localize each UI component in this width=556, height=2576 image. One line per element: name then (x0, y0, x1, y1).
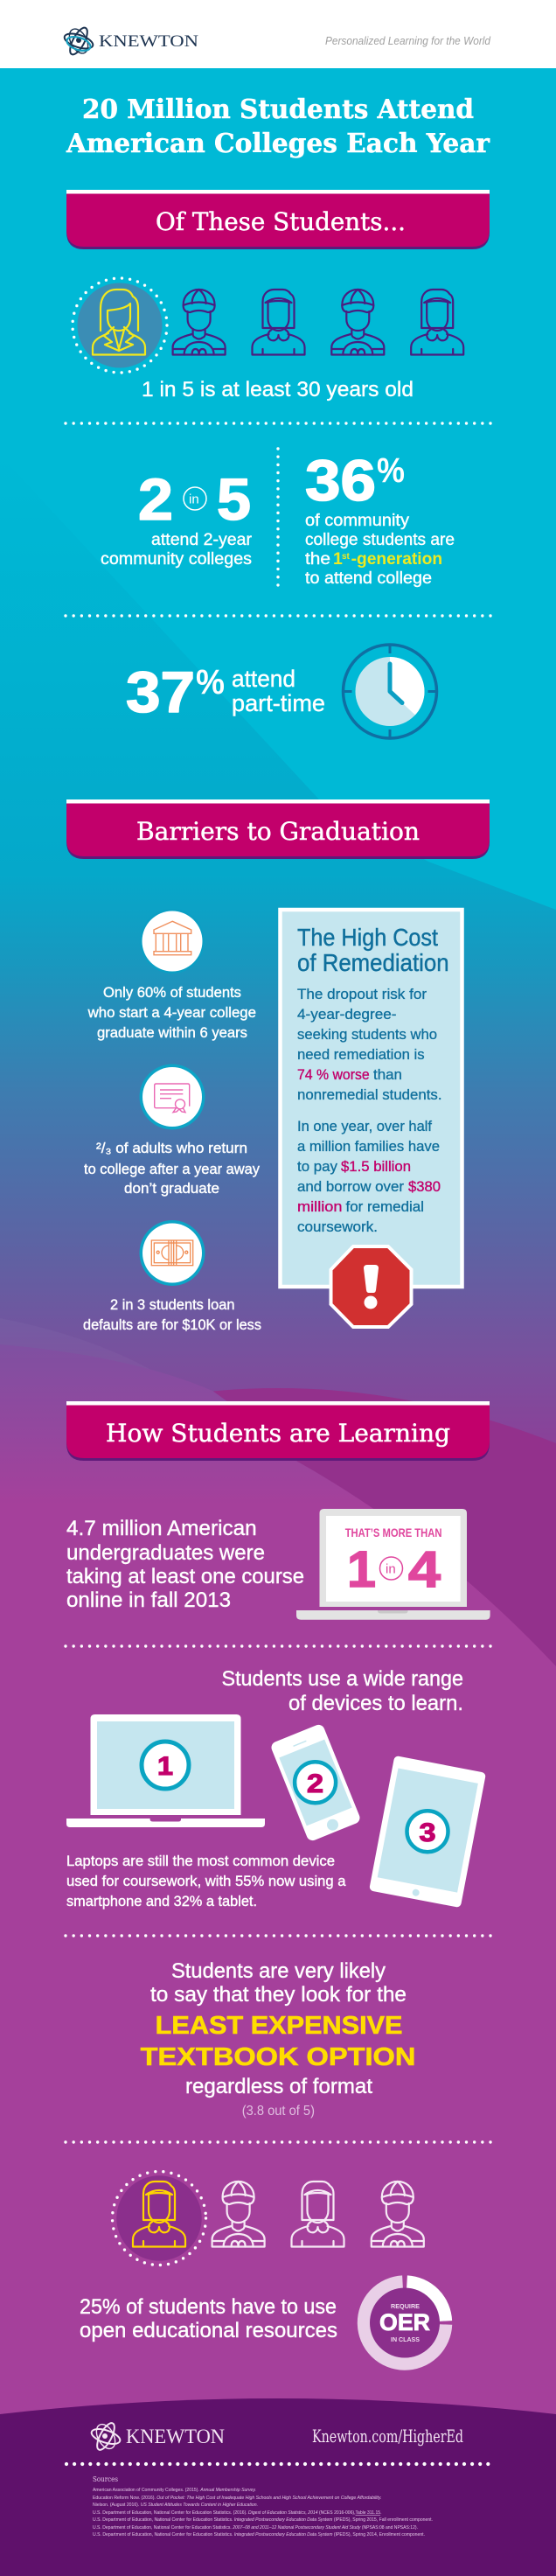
sources: Nielson. (August 2016). US Student Attitudes Towards Content in Higher Education. (93, 2503, 258, 2508)
title: American Colleges Each Year (66, 129, 490, 159)
text: 4.7 million undergraduates: 4.7 million American (66, 1517, 257, 1540)
text: least expensive textbook: LEAST EXPENSIVE (156, 2012, 402, 2040)
stat: 37% part-time: attend (232, 666, 295, 692)
sources: U.S. Department of Education, National Center for Education Statistics. (2016). Digest of Education Statistics, 2014 (NCES 2016-006),Table 311.15. (93, 2510, 381, 2516)
barrier: loan defaults: defaults are for $10K or less (83, 1317, 261, 1333)
title (66, 94, 490, 159)
panel body: dropout risk (297, 987, 442, 1103)
barrier: adults returning: to college after a year away (84, 1162, 261, 1177)
icon: laptop with 1 in 4: THAT’S MORE THAN (345, 1526, 442, 1539)
stat: 36% first generation: of community (305, 511, 409, 530)
text: least expensive textbook: TEXTBOOK OPTION (141, 2043, 415, 2071)
text: 4.7 million undergraduates (66, 1517, 304, 1612)
heading: range of devices: Students use a wide range (222, 1667, 463, 1691)
barrier: college graduation: who start a 4-year college (87, 1005, 256, 1021)
icon: college building (140, 909, 205, 974)
stat: 37% part-time: part-time (232, 690, 325, 716)
footer url: Knewton.com/HigherEd (312, 2426, 463, 2447)
panel heading: The High Cost (297, 924, 438, 951)
icon row: five students, one highlighted (73, 278, 463, 373)
barrier: college graduation (87, 909, 256, 1041)
stat: 2 in 5: attend 2-year (151, 530, 253, 549)
icon: tablet number 3: 3 (420, 1819, 435, 1847)
banner: How Students are Learning: How Students are Learning (106, 1419, 450, 1448)
highlighted student (73, 278, 167, 373)
panel body: dropout risk: 74 % worse (297, 1067, 370, 1083)
panel body: cost (297, 1119, 441, 1235)
stat: 37% part-time (126, 660, 325, 724)
stat: 37% part-time: 37 (126, 660, 195, 724)
barrier: adults returning: ²/₃ of adults who return (96, 1141, 247, 1156)
panel body: cost: $1.5 billion (341, 1159, 411, 1175)
panel body: cost: a million families have (297, 1139, 440, 1155)
title: 20 Million Students Attend (82, 94, 474, 125)
text: 25% open educational resources (80, 2295, 337, 2342)
panel body: dropout risk: The dropout risk for (297, 987, 427, 1002)
highlighted student (112, 2171, 206, 2265)
stat: 2 in 5: 5 (217, 467, 251, 533)
text: least expensive textbook: Students are very likely (171, 1959, 386, 1983)
stat: 36% first generation: 1 (333, 549, 343, 569)
icon: laptop with 1 in 4: in (386, 1562, 396, 1576)
icon: clock (343, 645, 437, 738)
donut chart: require OER (364, 2282, 446, 2364)
panel body: cost: $380 (408, 1179, 441, 1195)
sources: Education Reform Now. (2016). Out of Pocket: The High Cost of Inadequate High Schools and High School Achievement on College Affordability. (93, 2496, 381, 2501)
stat: 36% first generation: to attend college (305, 569, 432, 588)
panel body: cost: and borrow over (297, 1179, 405, 1195)
in badge (184, 487, 206, 510)
icon: laptop with 1 in 4 (296, 1509, 490, 1620)
text: least expensive textbook: regardless of format (185, 2075, 372, 2098)
panel body: dropout risk: seeking students who (297, 1027, 437, 1043)
text: 4.7 million undergraduates: taking at least one course (66, 1565, 304, 1588)
stat: 37% part-time: % (196, 663, 225, 702)
banner: Barriers to Graduation (66, 799, 490, 859)
stat: 36% first generation: 36 (305, 448, 376, 513)
banner: Of These Students: Of These Students... (156, 207, 406, 236)
icon: laptop with 1 in 4: 1 (347, 1541, 376, 1598)
stat: 36% first generation: -generation (351, 549, 442, 569)
sources: U.S. Department of Education, National Center for Education Statistics. Integrated Postsecondary Education Data System (IPEDS), Spring 2014, Enrollment component. (93, 2532, 425, 2538)
stat: 36% first generation: college students are (305, 530, 455, 549)
stat: 36% first generation (305, 448, 455, 588)
panel body: cost: coursework. (297, 1219, 378, 1235)
header bar (0, 0, 556, 68)
sources: Sources (93, 2475, 118, 2484)
text: laptops most common: used for coursework, with 55% now using a (66, 1874, 346, 1889)
text: laptops most common: smartphone and 32% a tablet. (66, 1894, 257, 1909)
banner: Barriers to Graduation: Barriers to Graduation (136, 817, 420, 846)
logo: Knewton: KNEWTON (99, 32, 198, 51)
stat: 2 in 5: 2 (138, 467, 173, 533)
panel heading (297, 924, 449, 976)
text: laptops most common: Laptops are still the most common device (66, 1853, 335, 1869)
icon: money bill (140, 1220, 205, 1286)
icon row: four students, one highlighted (112, 2171, 424, 2265)
text: least expensive textbook (141, 1959, 415, 2119)
footer (0, 2398, 556, 2576)
panel body: cost: for remedial (346, 1199, 424, 1215)
text: least expensive textbook: (3.8 out of 5) (242, 2104, 315, 2119)
heading: range of devices: of devices to learn. (288, 1692, 463, 1715)
icon: warning stop sign (330, 1246, 411, 1327)
text: 25% open educational resources: 25% of students have to use (80, 2295, 337, 2319)
donut chart: require OER: IN CLASS (391, 2335, 420, 2343)
icon: phone number 2: 2 (307, 1770, 323, 1798)
footer logo (90, 2420, 225, 2453)
text: 4.7 million undergraduates: online in fall 2013 (66, 1588, 231, 1612)
panel body: cost: In one year, over half (297, 1119, 432, 1134)
donut chart: require OER: OER (379, 2309, 430, 2335)
icon: laptop number 1 (66, 1714, 265, 1827)
panel body: cost: million (297, 1199, 343, 1215)
heading: range of devices (222, 1667, 463, 1715)
icon: tablet number 3 (369, 1756, 486, 1908)
text: 25% open educational resources: open educational resources (80, 2319, 337, 2342)
in badge: in (189, 492, 199, 507)
stat: 36% first generation: % (377, 451, 405, 490)
panel body: dropout risk: 4-year-degree- (297, 1007, 397, 1023)
sources (93, 2475, 433, 2538)
panel body: dropout risk: than (373, 1067, 402, 1083)
sources: American Association of Community Colleges. (2015). Annual Membership Survey. (93, 2488, 256, 2493)
stat: 2 in 5: community colleges (101, 549, 252, 569)
text: laptops most common (66, 1853, 346, 1909)
stat: 2 in 5 (101, 467, 253, 569)
logo: Knewton (63, 25, 198, 57)
text: least expensive textbook: to say that they look for the (150, 1983, 407, 2007)
tagline: Personalized Learning for the World (325, 34, 491, 47)
panel body: dropout risk: need remediation is (297, 1047, 425, 1063)
student icons (173, 290, 463, 355)
barrier: loan defaults: 2 in 3 students loan (110, 1297, 234, 1313)
sources: U.S. Department of Education, National Center for Education Statistics. 2007–08 and 2011–12 National Postsecondary Student Aid Study (NPSAS:08 and NPSAS:12). (93, 2525, 418, 2531)
student icons (212, 2182, 424, 2246)
donut chart: require OER: REQUIRE (391, 2302, 420, 2310)
banner: Of These Students (66, 190, 490, 249)
stat: 36% first generation: the (305, 549, 330, 569)
barrier: adults returning: don’t graduate (124, 1181, 219, 1197)
icon: phone number 2 (269, 1723, 362, 1842)
footer logo: KNEWTON (126, 2426, 225, 2447)
barrier: adults returning (84, 1064, 261, 1197)
icon: laptop number 1: 1 (157, 1752, 173, 1781)
sources: U.S. Department of Education, National Center for Education Statistics. Integrated Postsecondary Education Data System (IPEDS), Spring 2015, Fall enrollment component. (93, 2517, 433, 2523)
caption: 1 in 5: 1 in 5 is at least 30 years old (142, 378, 414, 401)
text: 4.7 million undergraduates: undergraduates were (66, 1541, 265, 1565)
barrier: college graduation: Only 60% of students (103, 985, 241, 1001)
icon: laptop with 1 in 4: 4 (408, 1541, 441, 1598)
stat: 36% first generation: st (342, 552, 351, 562)
barrier: loan defaults (83, 1220, 261, 1333)
panel heading: of Remediation (297, 949, 449, 976)
panel body: dropout risk: nonremedial students. (297, 1087, 442, 1103)
banner: How Students are Learning (66, 1401, 490, 1461)
icon: certificate (140, 1064, 205, 1130)
barrier: college graduation: graduate within 6 years (97, 1025, 247, 1041)
panel: The High Cost of Remediation (280, 910, 462, 1327)
panel body: cost: to pay (297, 1159, 338, 1175)
